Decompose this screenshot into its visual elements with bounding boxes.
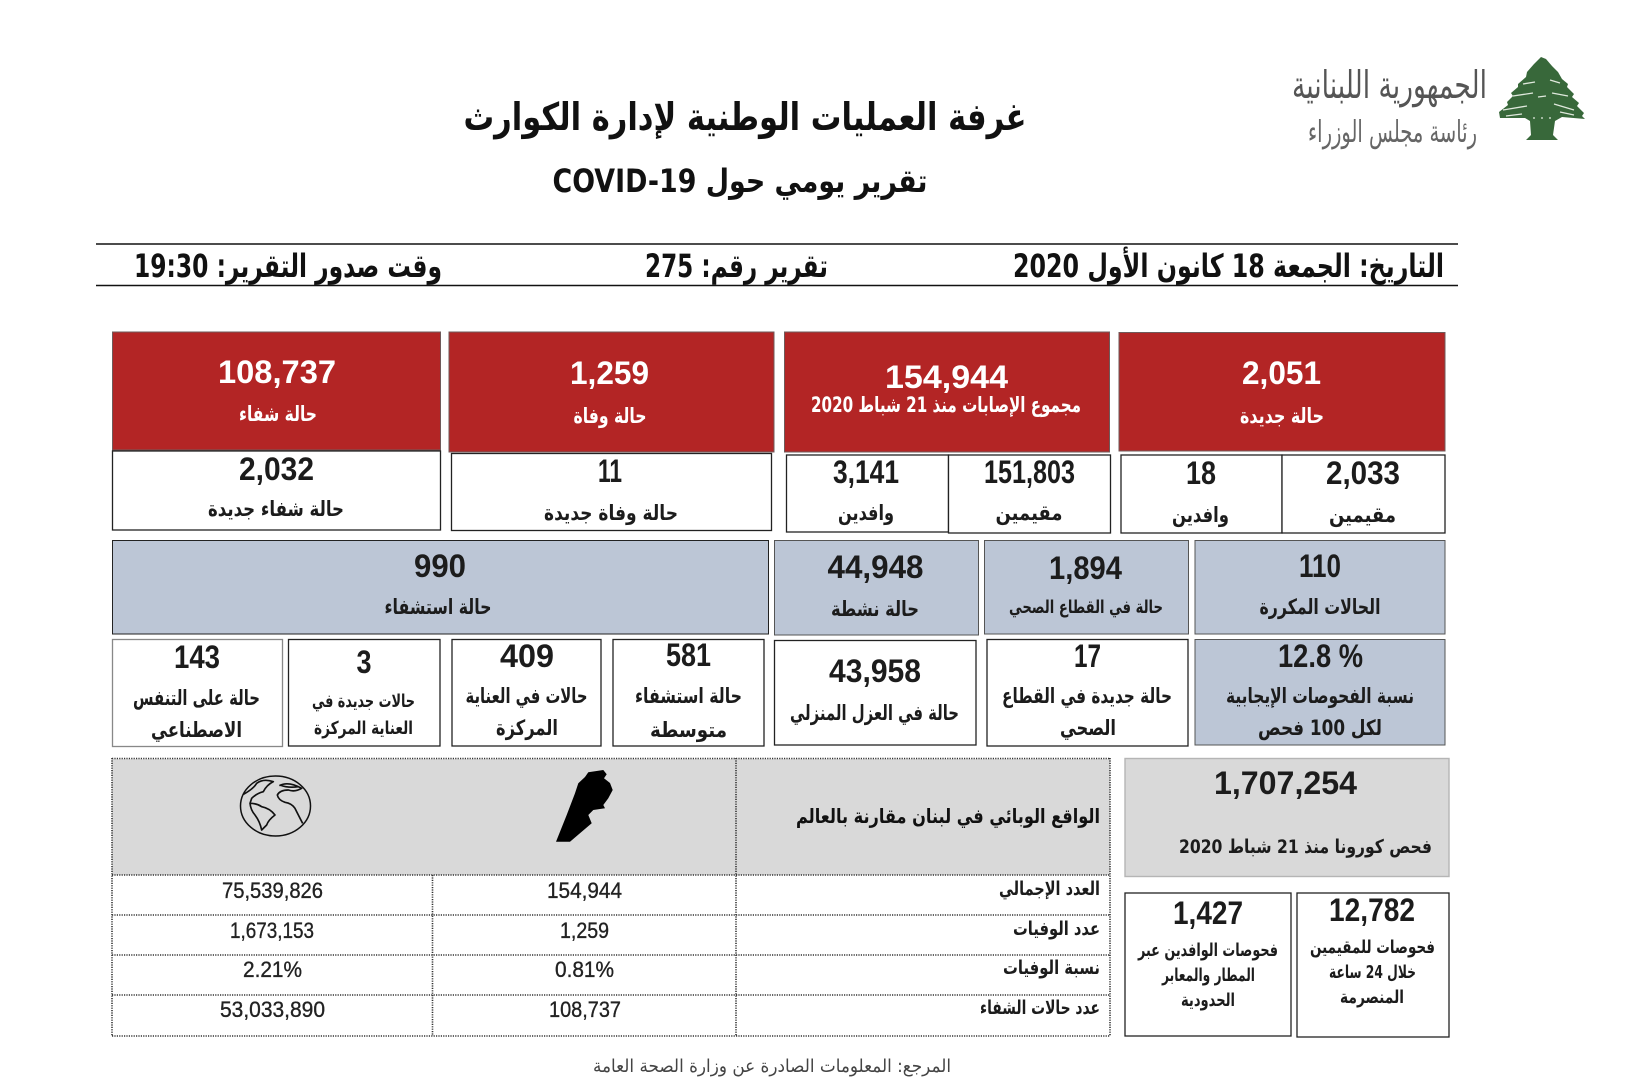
row: total cases: 75,539,826: [222, 878, 323, 903]
text: Lebanese Republic: الجمهورية اللبنانية: [1292, 63, 1487, 108]
number: 409: [500, 638, 554, 674]
icon: globe: [240, 776, 310, 836]
label: حالة في العزل المنزلي: [790, 701, 959, 725]
row: recoveries: 53,033,890: [220, 997, 325, 1022]
number: 2,051: [1242, 355, 1321, 391]
label line 2: خلال 24 ساعة: [1329, 962, 1416, 983]
number: 12,782: [1329, 892, 1415, 928]
label: حالة شفاء جديدة: [208, 497, 344, 521]
panel: active cases: [774, 540, 978, 635]
number: 12.8 %: [1278, 638, 1363, 674]
row: fatality rate: 2.21%: [243, 957, 302, 982]
row: total cases: 154,944: [547, 878, 622, 903]
row: recoveries: [220, 997, 1100, 1022]
label: فحص كورونا منذ 21 شباط 2020: [1179, 836, 1432, 858]
panel: deaths: [449, 332, 774, 452]
panel: new residents: [1282, 455, 1445, 533]
number: 2,032: [239, 451, 314, 487]
number: 17: [1074, 638, 1101, 674]
panel: on ventilators: [112, 639, 282, 746]
label line 2: المركزة: [496, 716, 558, 740]
report info bar: [96, 244, 1458, 286]
panel: new health sector cases: [987, 638, 1188, 746]
panel: positivity rate: [1195, 638, 1445, 745]
label: فحوصات الوافدين عبر: [1137, 940, 1278, 961]
table heading: الواقع الوبائي في لبنان مقارنة بالعالم: [796, 804, 1100, 829]
label: حالات جديدة في: [312, 691, 415, 712]
label: حالة وفاة جديدة: [544, 501, 678, 525]
label: حالة نشطة: [831, 597, 919, 621]
panel: health sector cases: [984, 540, 1188, 634]
label line 2: المطار والمعابر: [1161, 965, 1255, 986]
row: recoveries: عدد حالات الشفاء: [980, 997, 1100, 1019]
label: حالة استشفاء: [384, 595, 492, 619]
row: fatality rate: 0.81%: [555, 957, 614, 982]
number: 151,803: [984, 454, 1075, 490]
number: 3,141: [833, 454, 899, 490]
number: 1,894: [1049, 550, 1122, 586]
number: 990: [414, 548, 466, 584]
number: 43,958: [829, 653, 921, 689]
label: الحالات المكررة: [1260, 595, 1380, 619]
label line 2: الاصطناعي: [151, 718, 242, 742]
panel: home isolation: [774, 640, 976, 745]
label: حالة جديدة في القطاع: [1002, 684, 1172, 708]
label: حالات في العناية: [466, 684, 588, 708]
number: 1,259: [570, 355, 649, 391]
panel: new deaths: [452, 453, 772, 530]
label: مقيمين: [1329, 503, 1396, 527]
label: حالة شفاء: [239, 402, 317, 426]
number: 18: [1186, 455, 1216, 491]
panel: recoveries: [112, 332, 440, 450]
number: 1,427: [1173, 895, 1243, 931]
panel: residents tests: [1297, 892, 1449, 1037]
label: فحوصات للمقيمين: [1310, 937, 1435, 958]
panel: arrivals tests: [1125, 893, 1291, 1036]
row: total cases: العدد الإجمالي: [999, 878, 1100, 900]
label: نسبة الفحوصات الإيجابية: [1226, 684, 1414, 708]
label: حالة استشفاء: [635, 684, 742, 708]
panel: new ICU cases: [288, 640, 440, 746]
number: 3: [356, 644, 372, 680]
label line 2: العناية المركزة: [314, 718, 413, 739]
label: وافدين: [1172, 503, 1229, 527]
panel: moderate hospital cases: [613, 637, 764, 746]
panel: hospitalised: [112, 540, 768, 634]
panel: new recoveries: [112, 451, 440, 530]
row: fatality rate: [243, 957, 1100, 982]
row: deaths: عدد الوفيات: [1013, 918, 1100, 940]
number: 108,737: [218, 354, 336, 390]
row: fatality rate: نسبة الوفيات: [1003, 957, 1100, 979]
label: حالة في القطاع الصحي: [1009, 597, 1163, 618]
number: 154,944: [885, 359, 1008, 395]
label line 2: الصحي: [1060, 716, 1116, 740]
row: deaths: 1,259: [560, 918, 609, 943]
panel: repeated cases: [1195, 540, 1445, 634]
title: غرفة العمليات الوطنية لإدارة الكوارث: [464, 95, 1026, 139]
panel: total residents: [948, 454, 1110, 533]
label line 3: الحدودية: [1181, 990, 1235, 1011]
label line 2: لكل 100 فحص: [1258, 716, 1382, 740]
number: 2,033: [1326, 455, 1400, 491]
panel: total PCR tests: [1125, 758, 1449, 876]
panel: ICU cases: [452, 638, 601, 746]
label: وافدين: [838, 501, 894, 525]
number: 11: [598, 453, 622, 489]
label: حالة على التنفس: [133, 686, 260, 710]
row: total cases: [222, 878, 1100, 903]
report time: وقت صدور التقرير: 19:30: [134, 247, 442, 285]
number: 581: [666, 637, 711, 673]
row: deaths: 1,673,153: [230, 918, 314, 943]
comparison table: Lebanon versus world: [112, 758, 1110, 1036]
panel: new arrivals: [1121, 455, 1282, 533]
panel: total arrivals: [786, 454, 948, 532]
report number: تقرير رقم: 275: [645, 247, 828, 285]
row: recoveries: 108,737: [549, 997, 621, 1022]
icon: cedar tree: [1499, 57, 1585, 140]
number: 110: [1299, 548, 1341, 584]
panel: total cases: [784, 332, 1110, 452]
label line 2: متوسطة: [650, 718, 727, 742]
source note: المرجع: المعلومات الصادرة عن وزارة الصحة العامة: [593, 1056, 951, 1077]
subtitle: تقرير يومي حول COVID-19: [552, 162, 928, 200]
icon: map of Lebanon: [556, 770, 613, 842]
label: حالة جديدة: [1240, 404, 1324, 428]
number: 1,707,254: [1214, 765, 1357, 801]
label: مجموع الإصابات منذ 21 شباط 2020: [811, 393, 1081, 417]
logo: Lebanese cedar and presidency of the council of ministers: [1292, 57, 1585, 150]
date: التاريخ: الجمعة 18 كانون الأول 2020: [1013, 246, 1444, 285]
panel: new cases: [1119, 332, 1445, 451]
row: deaths: [230, 918, 1100, 943]
label: مقيمين: [996, 501, 1062, 525]
text: presidency of the council of ministers: رئاسة مجلس الوزراء: [1308, 115, 1477, 150]
number: 44,948: [828, 549, 924, 585]
label: حالة وفاة: [574, 404, 646, 428]
label line 3: المنصرمة: [1340, 987, 1404, 1008]
number: 143: [174, 639, 220, 675]
